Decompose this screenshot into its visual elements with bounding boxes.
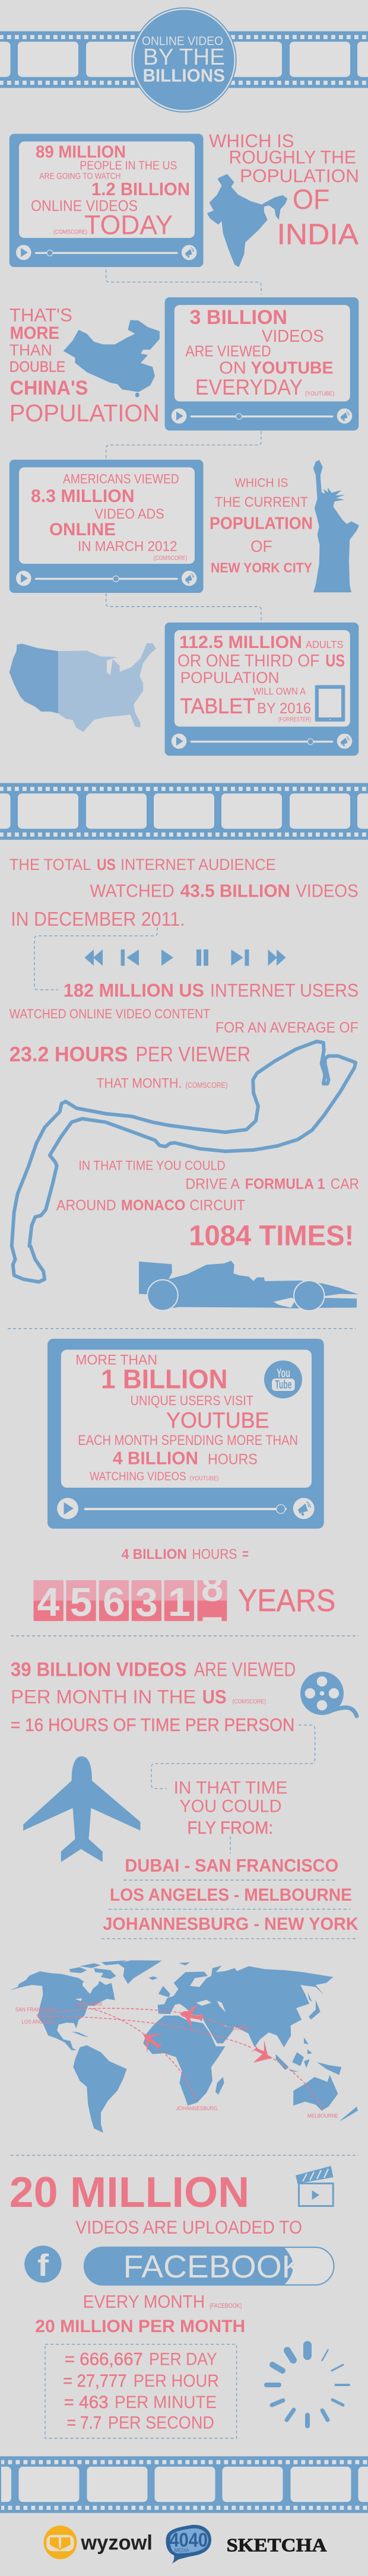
slider knob — [307, 739, 313, 745]
play button — [57, 1498, 78, 1519]
route: LOS ANGELES - MELBOURNE — [110, 1885, 352, 1905]
line: POPULATION — [210, 514, 313, 533]
rolling digit — [202, 1580, 222, 1621]
icon: Facebook logo — [24, 2245, 62, 2283]
icon: YouTube logo: You — [277, 1367, 290, 1380]
line: WATCHED — [90, 881, 175, 901]
stat text: AMERICANS VIEWED — [63, 472, 179, 487]
icon: airplane — [23, 1756, 140, 1862]
sound button — [293, 1498, 315, 1519]
line: FOR AN AVERAGE OF — [215, 1019, 359, 1036]
text block: 39 billion videos per month — [11, 1659, 296, 1735]
line: OF — [293, 184, 330, 215]
connector — [106, 431, 261, 459]
line: CHINA'S — [10, 377, 88, 399]
panel: video player 89 million — [9, 134, 204, 267]
line: CAR — [331, 1176, 359, 1193]
stat text: TABLET — [180, 694, 255, 718]
connector — [106, 269, 261, 294]
line: INDIA — [277, 219, 359, 251]
stat text: 1 BILLION — [101, 1364, 228, 1395]
player frame — [165, 622, 359, 756]
city label: SAN FRANCISCO — [15, 2006, 56, 2012]
text: 4 billion hours equals — [122, 1547, 249, 1562]
stat text: 4 BILLION — [113, 1447, 198, 1468]
logo: 4040 media: MEDIA — [175, 2548, 189, 2553]
line: THAN — [9, 341, 52, 359]
source: (YOUTUBE) — [190, 1475, 218, 1482]
icon: tablet — [315, 685, 345, 722]
source: (COMSCORE) — [233, 1698, 266, 1705]
text: videos are uploaded to: VIDEOS ARE UPLOADED TO — [75, 2217, 302, 2238]
text block: population of New York City — [210, 476, 313, 575]
logo: wyzowl — [44, 2526, 153, 2559]
line: ROUGHLY THE — [229, 146, 356, 167]
icon: YouTube logo: Tube — [275, 1378, 292, 1392]
heading: 20 million: 20 MILLION — [9, 2169, 249, 2216]
line: HOURS — [192, 1547, 237, 1562]
text block: flight routes — [103, 1855, 359, 1934]
logo: 4040 media: 4040 — [170, 2529, 208, 2551]
stat text: ONLINE — [49, 520, 116, 539]
line: AROUND — [56, 1198, 116, 1214]
line: 23.2 HOURS — [9, 1042, 128, 1066]
strip left edge — [0, 2456, 1, 2513]
text block: every month — [35, 2291, 245, 2336]
rate: = 463 — [64, 2393, 109, 2412]
stat text: 1.2 BILLION — [91, 179, 190, 199]
city label: DUBAI — [233, 2025, 248, 2031]
eastern states — [58, 643, 156, 732]
line: POPULATION — [9, 399, 160, 427]
line: ARE VIEWED — [194, 1659, 296, 1681]
line: EVERY MONTH — [83, 2291, 205, 2312]
line: PER VIEWER — [135, 1042, 250, 1066]
digit: 4 — [37, 1580, 60, 1625]
rate unit: PER HOUR — [134, 2371, 219, 2391]
line: FORMULA 1 — [245, 1176, 325, 1193]
title line 2: BY THE — [143, 45, 225, 70]
routes — [36, 2008, 180, 2015]
line: 39 BILLION VIDEOS — [11, 1659, 186, 1681]
route: DUBAI - SAN FRANCISCO — [125, 1855, 338, 1876]
line: US — [202, 1686, 227, 1708]
line: WHICH IS — [209, 130, 294, 151]
screen — [61, 1349, 312, 1488]
stat text: EVERYDAY — [195, 374, 303, 399]
western states — [9, 644, 58, 713]
source: (FORRESTER) — [278, 717, 311, 723]
slider knob — [47, 250, 53, 256]
line: POPULATION — [240, 165, 359, 186]
stat text: POPULATION — [180, 669, 279, 687]
city label: MELBOURNE — [307, 2113, 338, 2118]
rate unit: PER SECOND — [108, 2413, 214, 2433]
player frame — [47, 1339, 324, 1529]
connector — [151, 1725, 315, 1789]
panel: video player 8.3 million — [9, 460, 204, 593]
stat text: UNIQUE USERS VISIT — [131, 1393, 253, 1408]
connector — [34, 928, 157, 990]
icon: map of China — [64, 320, 160, 398]
icon: Monaco circuit — [12, 1041, 356, 1282]
route: JOHANNESBURG - NEW YORK — [103, 1914, 359, 1934]
label: years: YEARS — [238, 1583, 335, 1618]
line: THE TOTAL — [9, 856, 91, 874]
stat text: EACH MONTH SPENDING MORE THAN — [78, 1433, 298, 1449]
stat text: 3 BILLION — [190, 306, 287, 329]
stat text: YOUTUBE — [250, 358, 334, 377]
icon: Statue of Liberty — [313, 460, 359, 592]
icon: YouTube logo — [264, 1361, 302, 1399]
header film strip — [0, 31, 368, 88]
icon: play — [161, 949, 173, 966]
stat text: VIDEO ADS — [94, 506, 164, 522]
panel: YouTube video player — [47, 1339, 324, 1529]
city label: JOHANNESBURG — [176, 2105, 217, 2111]
line: 4 BILLION — [122, 1547, 187, 1562]
rate unit: PER MINUTE — [115, 2393, 217, 2412]
counter: 456318 years — [33, 1580, 227, 1621]
stat text: ADULTS — [306, 639, 343, 650]
line: US — [97, 856, 116, 874]
player frame — [9, 460, 204, 593]
rolling digit: 7 — [201, 1609, 223, 1654]
digit: 5 — [70, 1580, 93, 1625]
line: MORE — [10, 323, 59, 343]
rate: = 666,667 — [65, 2349, 143, 2369]
line: NEW YORK CITY — [211, 560, 312, 575]
inland water — [75, 1979, 231, 2028]
stat text: ONLINE VIDEOS — [31, 198, 138, 214]
source: (COMSCORE) — [185, 1081, 228, 1090]
plane markers — [142, 2003, 273, 2063]
line: IN THAT TIME YOU COULD — [78, 1158, 226, 1173]
icon: pause — [196, 949, 208, 966]
icons: media controls — [84, 949, 286, 966]
icon: next — [231, 949, 249, 966]
line: THAT MONTH. — [96, 1075, 182, 1091]
stat text: MORE THAN — [75, 1352, 157, 1368]
rate: = 7.7 — [67, 2413, 101, 2433]
slider knob — [236, 414, 242, 420]
line: CIRCUIT — [190, 1198, 245, 1214]
rolling digit: 8 — [201, 1565, 223, 1610]
connector — [106, 593, 261, 622]
digit: 1 — [168, 1580, 191, 1625]
line: INTERNET AUDIENCE — [120, 856, 276, 874]
land masses — [9, 1960, 358, 2133]
digit: 6 — [103, 1580, 125, 1625]
text block: total US internet audience — [9, 856, 359, 930]
source: (FACEBOOK) — [210, 2302, 242, 2310]
stat text: 8.3 MILLION — [31, 486, 135, 506]
line: DRIVE A — [185, 1176, 240, 1193]
icon: Facebook logo: f — [37, 2248, 49, 2283]
line: 1084 TIMES! — [189, 1221, 354, 1252]
section film strip — [0, 783, 368, 840]
text block: 182 million users — [9, 979, 359, 1091]
text block: more than double China's population — [9, 305, 160, 427]
stat text: WILL OWN A — [253, 686, 306, 697]
stat text: ARE VIEWED — [185, 343, 271, 360]
panel: video player 112.5 million — [165, 622, 359, 756]
text block: fly from — [174, 1778, 287, 1838]
line: PER MONTH IN THE — [11, 1686, 196, 1708]
icon: film reel — [300, 1672, 357, 1716]
stat text: BY 2016 — [257, 700, 311, 717]
slider — [85, 1508, 285, 1510]
line: DOUBLE — [9, 358, 65, 375]
stat text: TODAY — [84, 210, 173, 240]
line: = — [242, 1547, 249, 1562]
line: = 16 HOURS OF TIME PER PERSON — [11, 1715, 294, 1735]
line: FLY FROM: — [188, 1818, 273, 1838]
stat text: OR ONE THIRD OF — [177, 652, 319, 671]
icon: fast forward — [268, 949, 286, 966]
icon: map of India — [207, 174, 287, 267]
progress bar: Facebook — [84, 2247, 334, 2285]
logo: wyzowl: wyzowl — [80, 2531, 153, 2555]
line: IN THAT TIME — [174, 1778, 287, 1797]
line: WATCHED ONLINE VIDEO CONTENT — [9, 1006, 210, 1021]
stat text: PEOPLE IN THE US — [80, 159, 177, 173]
line: 43.5 BILLION — [180, 881, 290, 901]
stat text: 112.5 MILLION — [179, 633, 302, 652]
text block: which is roughly the population of India — [209, 130, 359, 251]
icon: clapperboard — [296, 2166, 334, 2206]
title line 3: BILLIONS — [142, 65, 225, 85]
text block: drive a Formula 1 car — [56, 1158, 359, 1252]
icon: previous — [121, 949, 139, 966]
stat text: US — [325, 652, 345, 671]
footer film strip — [0, 2456, 368, 2513]
chart: world map with routes — [9, 1960, 358, 2133]
icon: loading spinner — [267, 2345, 349, 2426]
icon: map of the USA — [9, 643, 156, 732]
stat text: IN MARCH 2012 — [78, 539, 177, 555]
slider knob — [113, 576, 119, 582]
logo: 4040 media — [166, 2525, 211, 2564]
stat text: ON — [219, 358, 246, 377]
line: 20 MILLION PER MONTH — [35, 2317, 245, 2336]
rate: = 27,777 — [63, 2371, 127, 2391]
slider knob — [277, 1505, 285, 1513]
player frame — [165, 297, 359, 431]
digit: 3 — [135, 1580, 158, 1625]
progress bar: Facebook: FACEBOOK — [123, 2249, 304, 2285]
stat text: WATCHING VIDEOS — [90, 1470, 186, 1484]
line: THE CURRENT — [215, 494, 308, 510]
player frame — [9, 134, 204, 267]
title badge — [131, 7, 237, 113]
city label: LOS ANGELES — [21, 2019, 55, 2025]
line: WHICH IS — [234, 476, 288, 490]
city label: NEW YORK — [76, 2002, 103, 2008]
title line 1: ONLINE VIDEO — [142, 33, 223, 48]
line: IN DECEMBER 2011. — [11, 909, 185, 930]
line: MONACO — [121, 1198, 185, 1214]
line: YOU COULD — [179, 1797, 281, 1816]
source: (COMSCORE) — [154, 555, 188, 561]
icon: rewind — [84, 949, 103, 966]
line: OF — [250, 537, 272, 555]
source: (COMSCORE) — [53, 228, 87, 236]
panel: video player 3 billion — [165, 297, 359, 431]
icon: Formula 1 car — [139, 1261, 359, 1311]
stat text: HOURS — [208, 1451, 258, 1468]
stat text: 89 MILLION — [36, 143, 126, 162]
line: 182 MILLION US — [64, 979, 204, 1000]
source: (YOUTUBE) — [305, 390, 335, 398]
stat text: YOUTUBE — [166, 1408, 269, 1432]
stat text: ARE GOING TO WATCH — [39, 171, 120, 181]
panel: upload rates — [45, 2344, 237, 2438]
stat text: VIDEOS — [262, 327, 324, 346]
line: THAT'S — [9, 305, 72, 325]
rate unit: PER DAY — [149, 2349, 217, 2369]
line: VIDEOS — [296, 881, 359, 901]
logo: Sketcha: SKETCHA — [227, 2534, 326, 2555]
